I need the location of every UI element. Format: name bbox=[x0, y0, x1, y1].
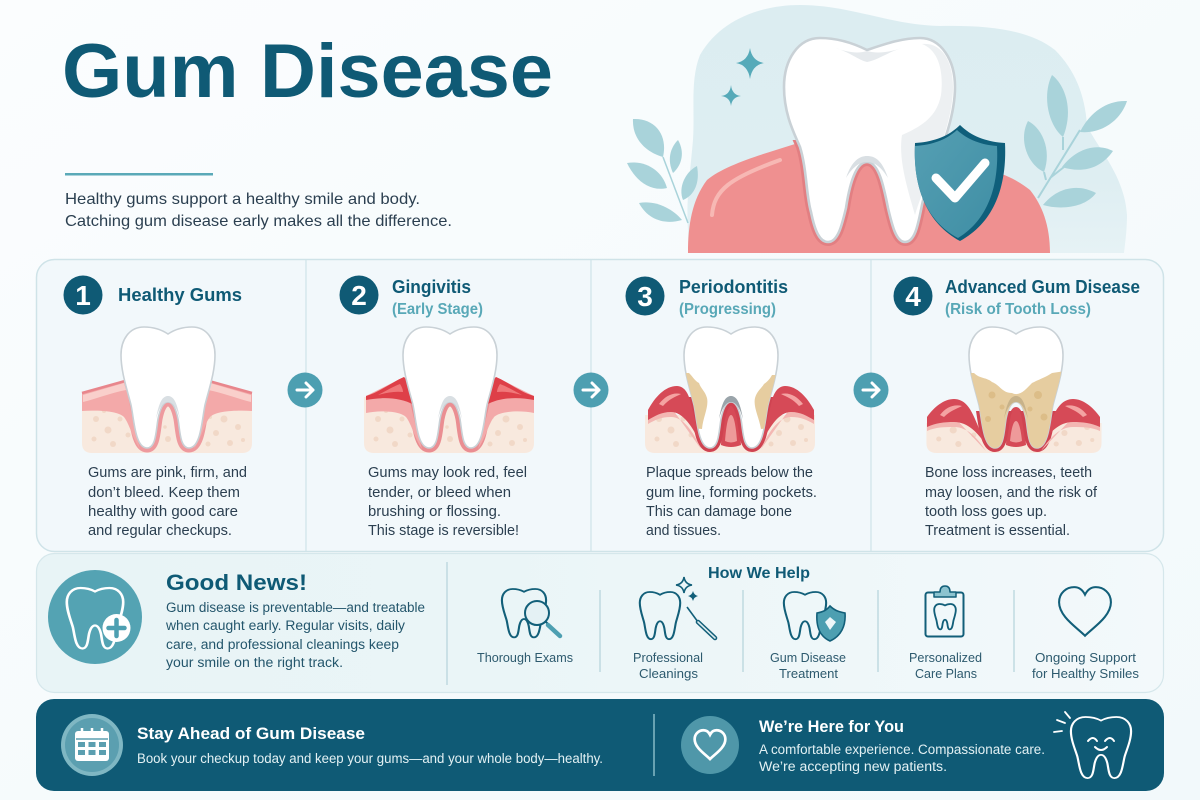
service: professional cleanings: Cleanings bbox=[639, 667, 698, 681]
stage 4: advanced gum disease: (Risk of Tooth Loss) bbox=[945, 301, 1091, 318]
arrow 2 bbox=[574, 372, 608, 408]
title: Gum Disease bbox=[62, 29, 553, 114]
stage 1: healthy gums bbox=[64, 276, 252, 539]
panel: four stages bbox=[36, 260, 1164, 552]
how we help heading: How We Help bbox=[708, 565, 810, 582]
here for you text: We’re accepting new patients. bbox=[759, 759, 947, 774]
here for you text: A comfortable experience. Compassionate care. bbox=[759, 742, 1045, 757]
stage 4: advanced gum disease: Bone loss increases, teeth bbox=[925, 465, 1092, 481]
stage 3: periodontitis: and tissues. bbox=[646, 523, 721, 539]
service: thorough exams bbox=[477, 589, 573, 665]
good news text: Gum disease is preventable—and treatable bbox=[166, 600, 425, 615]
service: ongoing support: Ongoing Support bbox=[1035, 651, 1137, 665]
stage 3: periodontitis bbox=[626, 276, 817, 539]
here for you text bbox=[759, 717, 1045, 774]
stage 4: advanced gum disease: Advanced Gum Disease bbox=[945, 277, 1140, 297]
stage 4: advanced gum disease: 4 bbox=[905, 281, 921, 312]
stage 3: periodontitis: gum line, forming pockets. bbox=[646, 485, 817, 501]
icon: heart bbox=[681, 716, 739, 774]
stage 3: periodontitis: This can damage bone bbox=[646, 504, 792, 520]
service: gum disease treatment: Gum Disease bbox=[770, 651, 846, 665]
stage 4: advanced gum disease: Treatment is essential. bbox=[925, 523, 1070, 539]
service: professional cleanings: Professional bbox=[633, 651, 703, 665]
good news text: when caught early. Regular visits, daily bbox=[165, 618, 405, 633]
stage 4: advanced gum disease: tooth loss goes up. bbox=[925, 504, 1047, 520]
stage 2: gingivitis: This stage is reversible! bbox=[368, 523, 519, 539]
service: personalized care plans: Personalized bbox=[909, 651, 982, 665]
intro text bbox=[65, 173, 452, 230]
service: gum disease treatment bbox=[770, 592, 846, 681]
stay ahead text: Book your checkup today and keep your gums—and your whole body—healthy. bbox=[137, 751, 603, 766]
stage 3: periodontitis: 3 bbox=[637, 281, 653, 312]
service: gum disease treatment: Treatment bbox=[779, 667, 839, 681]
stage 1: healthy gums: and regular checkups. bbox=[88, 523, 232, 539]
stage 2: gingivitis: (Early Stage) bbox=[392, 301, 483, 318]
stage 3: periodontitis: Periodontitis bbox=[679, 277, 788, 297]
stage 2: gingivitis: Gingivitis bbox=[392, 277, 471, 297]
stage 3: periodontitis: (Progressing) bbox=[679, 301, 776, 318]
service: personalized care plans bbox=[909, 586, 982, 681]
hero illustration: tooth with shield bbox=[627, 5, 1127, 253]
service: ongoing support: for Healthy Smiles bbox=[1032, 667, 1139, 681]
stage 1: healthy gums: don’t bleed. Keep them bbox=[88, 485, 240, 501]
service: personalized care plans: Care Plans bbox=[915, 667, 977, 681]
service: ongoing support bbox=[1032, 587, 1139, 681]
stage 1: healthy gums: 1 bbox=[75, 280, 91, 311]
good news text: your smile on the right track. bbox=[166, 655, 343, 670]
stay ahead text: Stay Ahead of Gum Disease bbox=[137, 724, 365, 743]
stage 4: advanced gum disease: may loosen, and the risk of bbox=[925, 485, 1098, 501]
good news text bbox=[165, 570, 425, 670]
service: professional cleanings bbox=[633, 577, 715, 681]
arrow 3 bbox=[854, 372, 888, 408]
icon: calendar bbox=[61, 714, 123, 776]
icon: smiling tooth bbox=[1054, 712, 1131, 778]
stage 3: periodontitis: Plaque spreads below the bbox=[646, 465, 813, 481]
panel: good news and how we help bbox=[36, 554, 1164, 692]
intro text: Healthy gums support a healthy smile and body. bbox=[65, 191, 420, 208]
stay ahead text bbox=[137, 724, 603, 766]
service: thorough exams: Thorough Exams bbox=[477, 651, 573, 665]
stage 1: healthy gums: Healthy Gums bbox=[118, 285, 242, 305]
arrow 1 bbox=[288, 372, 322, 408]
stage 2: gingivitis bbox=[340, 276, 534, 539]
good news text: care, and professional cleanings keep bbox=[166, 637, 399, 652]
stage 1: healthy gums: healthy with good care bbox=[88, 504, 238, 520]
stage 4: advanced gum disease bbox=[894, 276, 1140, 539]
stage 1: healthy gums: Gums are pink, firm, and bbox=[88, 465, 247, 481]
intro text: Catching gum disease early makes all the difference. bbox=[65, 213, 452, 230]
stage 2: gingivitis: Gums may look red, feel bbox=[368, 465, 527, 481]
stage 2: gingivitis: 2 bbox=[351, 280, 367, 311]
here for you text: We’re Here for You bbox=[759, 717, 904, 736]
good news text: Good News! bbox=[166, 570, 307, 595]
stage 2: gingivitis: brushing or flossing. bbox=[368, 504, 501, 520]
stage 2: gingivitis: tender, or bleed when bbox=[368, 485, 511, 501]
banner: call to action bbox=[36, 699, 1164, 791]
icon: tooth with plus bbox=[48, 570, 142, 664]
